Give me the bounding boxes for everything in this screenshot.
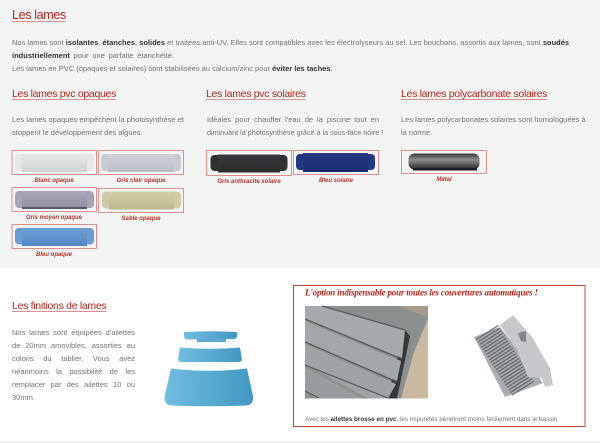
photo: volet lames [305,306,428,398]
image: ailette brosse [474,315,553,397]
swatch: Gris clair opaque: Gris clair opaque [116,178,166,184]
text: polycarbonate: la norme. [401,128,432,137]
swatch: Gris moyen opaque: Gris moyen opaque [26,215,83,221]
swatch: Bleu opaque [12,224,96,258]
intro text: Nos lames sont isolantes, étanches, solides et traitées anti-UV. Elles sont compatibles avec les électrolyseurs au sel. Les bouchons, assortis aux lames, sont soudés [12,38,569,47]
text: pvc opaques: stoppent le développement des algues. [12,128,143,137]
heading: option: L'option indispensable pour toutes les couvertures automatiques ! [304,288,538,298]
text: finitions: 30mm. [12,393,35,402]
option caption: Avec les ailettes brosse en pvc, les impuretés pénètrent moins facilement dans le bassin. [305,416,559,423]
heading: polycarbonate: Les lames polycarbonate solaires [401,88,547,100]
swatch: Blanc opaque: Blanc opaque [34,178,74,184]
intro text: Les lames en PVC (opaques et solaires) sont stabilisées au calcium/zinc pour éviter les taches. [12,64,333,73]
text: pvc solaires: Idéales pour chauffer l'eau de la piscine tout en [207,115,379,124]
heading: finitions: Les finitions de lames [12,300,106,312]
swatch: Blanc opaque [12,150,96,184]
text: finitions: remplacer par des ailettes 10 ou [12,380,135,389]
swatch: Gris anthracite solaire [206,150,292,185]
intro text [12,38,569,73]
swatch: Gris clair opaque [98,150,184,184]
swatch: Bleu solaire: Bleu solaire [319,178,354,184]
heading: pvc opaques: Les lames pvc opaques [12,88,116,100]
swatch: Métal [402,150,486,183]
text: pvc solaires: diminuant la photosynthèse grâce à la sous-face noire ! [207,128,383,137]
text: finitions: coloris du tablier. Vous avez [12,354,135,363]
swatch: Bleu solaire [294,150,378,184]
text: finitions: Nos lames sont équipées d'ailettes [12,328,135,337]
text: finitions [12,328,135,402]
panel: option [294,286,585,426]
swatch: Sable opaque: Sable opaque [121,216,161,222]
text: polycarbonate: Les lames polycarbonates solaires sont homologuées à [401,115,586,124]
text: pvc opaques [12,115,184,137]
text: polycarbonate [401,115,586,137]
intro text: industriellement pour une parfaite étanchéité. [12,51,174,60]
text: pvc opaques: Les lames opaques empêchent la photosynthèse et [12,115,184,124]
text: finitions: néanmoins la possibilité de les [12,367,135,376]
swatch: Gris anthracite solaire: Gris anthracite solaire [217,179,281,185]
image: ailettes bleues [164,331,253,406]
title: Les lames [12,8,66,22]
swatch: Sable opaque [98,188,184,222]
text: finitions: de 20mm amovibles, assorties au [12,341,135,350]
swatch: Métal: Métal [436,177,452,183]
swatch: Gris moyen opaque [12,188,96,221]
text: pvc solaires [207,115,383,137]
swatch: Bleu opaque: Bleu opaque [36,252,73,258]
heading: pvc solaires: Les lames pvc solaires [206,88,306,100]
